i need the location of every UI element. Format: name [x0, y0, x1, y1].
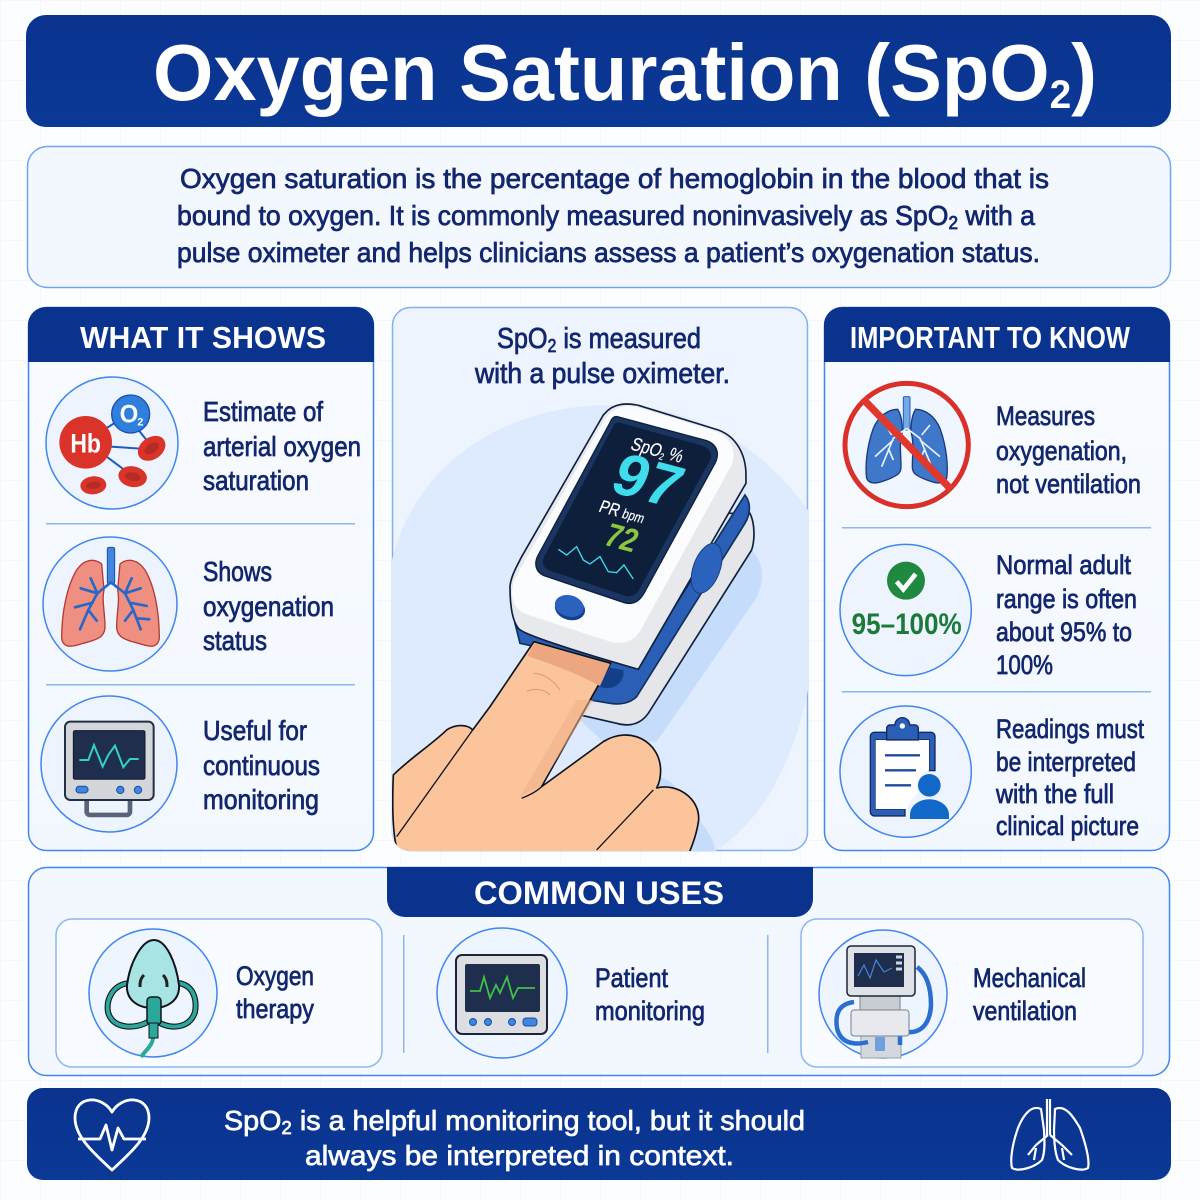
label: oxygen therapy: therapy — [236, 994, 314, 1024]
heading: measured with pulse oximeter: with a pulse oximeter. — [474, 358, 730, 390]
heading: common uses: COMMON USES — [474, 875, 724, 911]
intro text panel: pulse oximeter and helps clinicians assess a patient’s oxygenation status. — [177, 237, 1040, 268]
text: interpret with clinical picture: clinical picture — [996, 811, 1139, 841]
icon: normal range: 95–100% — [852, 608, 962, 641]
text: oxygenation status: Shows — [203, 556, 272, 587]
heading: common uses — [387, 867, 813, 917]
display: % — [662, 442, 687, 467]
hand — [393, 642, 699, 855]
title banner: ) — [1071, 28, 1097, 117]
text: continuous monitoring: Useful for — [203, 715, 307, 746]
label: patient monitoring — [595, 963, 705, 1026]
icon: normal range — [840, 544, 971, 676]
heading: measured with pulse oximeter — [474, 323, 730, 390]
panel: important to know — [824, 307, 1170, 850]
text: oxygenation not ventilation: oxygenation, — [996, 436, 1127, 466]
icon: bedside monitor — [41, 696, 177, 832]
title banner: 2 — [1050, 73, 1071, 117]
title banner: Oxygen Saturation (SpO — [153, 28, 1078, 117]
text: normal adult range: range is often — [996, 584, 1137, 614]
text: normal adult range — [996, 550, 1137, 680]
panel: common uses — [28, 867, 1170, 1076]
icon: hemoglobin and oxygen: Hb — [70, 428, 101, 458]
footer message: 2 — [282, 1118, 292, 1138]
oximeter button — [554, 595, 586, 620]
text: estimate: arterial oxygen — [203, 431, 361, 462]
footer message: is a helpful monitoring tool, but it should — [292, 1105, 805, 1136]
icon: hemoglobin and oxygen: 2 — [137, 416, 143, 428]
icon: lungs outline — [1011, 1099, 1089, 1170]
footer message: always be interpreted in context. — [305, 1140, 734, 1171]
icon: crossed lungs — [844, 383, 969, 507]
heading: measured with pulse oximeter: SpO — [497, 323, 555, 355]
text: normal adult range: about 95% to — [996, 617, 1132, 647]
heading: important to know: IMPORTANT TO KNOW — [850, 320, 1131, 355]
intro text panel: Oxygen saturation is the percentage of hemoglobin in the blood that is — [180, 163, 1049, 194]
oximeter body — [510, 404, 746, 669]
text: continuous monitoring: monitoring — [203, 784, 319, 815]
label: oxygen therapy: Oxygen — [236, 961, 314, 991]
text: oxygenation not ventilation: Measures — [996, 401, 1095, 431]
intro text panel: bound to oxygen. It is commonly measured noninvasively as SpO — [177, 200, 988, 231]
display: SpO — [628, 433, 672, 463]
icon: ventilator — [819, 930, 947, 1058]
title banner — [26, 15, 1171, 127]
text: oxygenation not ventilation: not ventilation — [996, 469, 1141, 499]
text: continuous monitoring: continuous — [203, 750, 320, 781]
heading: what it shows — [28, 307, 374, 362]
text: estimate — [203, 396, 361, 496]
text: oxygenation not ventilation — [996, 401, 1141, 499]
icon: oxygen mask — [89, 929, 217, 1057]
heading: measured with pulse oximeter: 2 — [548, 336, 556, 356]
oximeter hinge — [690, 542, 722, 594]
text: interpret with clinical picture: with the full — [995, 779, 1114, 809]
oximeter lower clamp — [515, 495, 754, 725]
text: interpret with clinical picture: be interpreted — [996, 747, 1136, 777]
illustration: fingertip oximeter on hand — [393, 404, 762, 855]
footer message: SpO — [224, 1105, 280, 1136]
text: estimate: saturation — [203, 465, 309, 496]
card: mechanical ventilation — [801, 919, 1143, 1067]
panel: pulse oximeter illustration — [392, 308, 808, 855]
heading: measured with pulse oximeter: is measured — [556, 323, 701, 355]
panel: what it shows — [28, 307, 374, 850]
label: mechanical ventilation — [973, 963, 1086, 1026]
display: PR bpm — [596, 497, 648, 527]
display: 97 — [603, 440, 694, 520]
text: normal adult range: Normal adult — [996, 550, 1131, 580]
label: oxygen therapy — [236, 961, 314, 1024]
footer banner — [27, 1088, 1171, 1180]
label: mechanical ventilation: Mechanical — [973, 963, 1086, 993]
icon: lungs — [43, 537, 177, 671]
text: estimate: Estimate of — [203, 396, 323, 427]
label: mechanical ventilation: ventilation — [973, 996, 1077, 1026]
label: patient monitoring: monitoring — [595, 996, 705, 1026]
intro text panel — [28, 146, 1170, 288]
card: oxygen therapy — [56, 919, 382, 1067]
text: oxygenation status: status — [203, 625, 267, 656]
display — [536, 417, 717, 603]
text: continuous monitoring — [203, 715, 320, 815]
heading: important to know — [824, 307, 1170, 362]
icon: patient monitor — [437, 928, 567, 1058]
icon: clipboard with patient — [840, 706, 971, 837]
text: interpret with clinical picture — [995, 714, 1144, 841]
display: 72 — [599, 517, 644, 560]
label: patient monitoring: Patient — [595, 963, 668, 993]
intro text panel: with a — [958, 200, 1035, 231]
icon: hemoglobin and oxygen — [46, 377, 178, 509]
text: interpret with clinical picture: Readings must — [996, 714, 1144, 744]
text: oxygenation status: oxygenation — [203, 591, 334, 622]
icon: heart with pulse — [75, 1100, 149, 1170]
display: 2 — [657, 452, 666, 462]
heading: what it shows: WHAT IT SHOWS — [80, 320, 326, 355]
text: normal adult range: 100% — [996, 650, 1053, 680]
text: oxygenation status — [203, 556, 334, 656]
footer message — [224, 1105, 805, 1171]
intro text panel: 2 — [948, 213, 958, 233]
icon: hemoglobin and oxygen: O — [120, 401, 138, 428]
